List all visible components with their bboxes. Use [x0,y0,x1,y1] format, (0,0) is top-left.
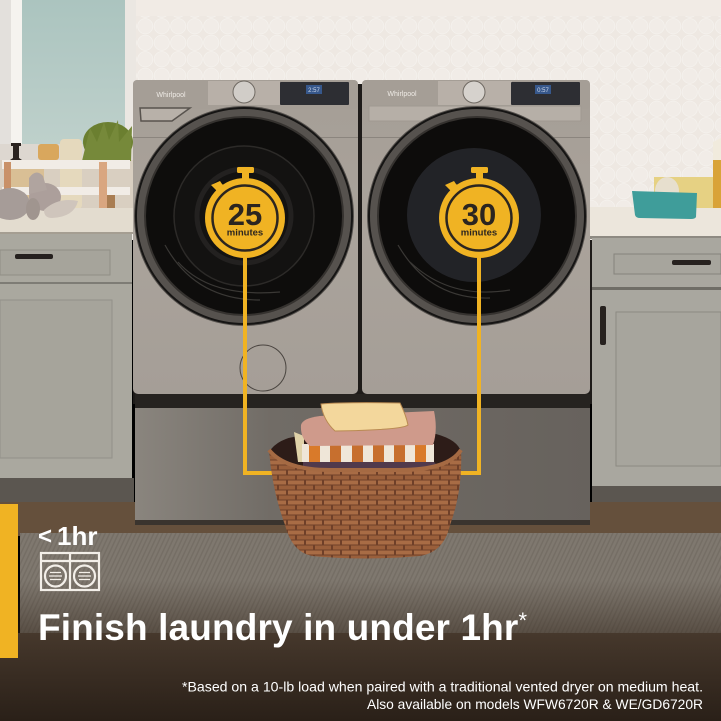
teal tray [632,191,697,219]
left counter shelf items [0,120,134,210]
door ring [134,106,354,326]
water inlet cap [240,345,286,391]
right counter and cabinet [588,207,721,506]
striped towel [294,432,434,462]
headline: * [518,608,527,633]
timer: washer 25 minutes: 25 [228,197,262,232]
dial [233,81,255,103]
yellow detergent bottle [713,160,721,208]
drum back [407,148,541,282]
timer: washer 25 minutes [205,167,285,258]
backsplash behind shelf [0,160,134,210]
brand: Whirlpool [387,91,417,98]
icon: washer and dryer pair [41,553,99,590]
window [0,0,136,168]
wicker basket body [269,450,461,558]
area rug [0,533,721,721]
display panel [280,82,349,105]
wall with hexagonal tile [0,0,721,240]
less than 1 hour badge [38,521,99,590]
drawer handle [15,254,53,259]
yellow towel [321,403,408,431]
drum [174,146,314,286]
display panel [511,82,580,105]
stuffed elephant toy [0,172,78,220]
connector line: washer [245,256,274,473]
timer: dryer 30 minutes: minutes [461,228,497,238]
floor [0,502,721,536]
door ring [367,106,587,326]
potted plant [82,120,133,162]
washer: 2:57 [308,88,320,94]
yellow box [654,177,713,208]
soap pump bottle [8,143,44,210]
sponge [38,144,59,160]
footnote: Also available on models WFW6720R & WE/GD6720R [367,696,703,712]
top control panel [362,80,590,109]
top recess [369,106,581,121]
headline: Finish laundry in under 1hr [38,607,518,648]
left counter and cabinet [0,208,134,502]
timer: washer 25 minutes: minutes [227,228,263,238]
drawer handle [672,260,711,265]
laundry basket with towels [269,403,461,558]
brand: Whirlpool [156,92,186,99]
dark gap between machines [356,84,364,244]
ceiling soffit [122,0,721,16]
washer [133,80,358,394]
dial [463,81,485,103]
right counter items [632,138,721,219]
top control panel [133,80,358,109]
connector line: dryer [458,256,479,473]
pedestal [135,394,590,520]
pink towel [301,411,436,446]
door handle [600,306,606,345]
toy [655,177,679,205]
dryer: 0:57 [537,88,549,94]
footnote [182,678,703,712]
dark gap behind machines [133,240,592,404]
timer: dryer 30 minutes: 30 [462,197,496,232]
dryer [362,80,590,394]
glass jar [60,139,82,209]
white basket shelf [2,160,130,209]
yellow accent bar [0,504,18,658]
footnote: *Based on a 10-lb load when paired with a traditional vented dryer on medium heat. [182,678,703,694]
basket interior [269,434,461,475]
detergent drawer [140,108,190,121]
label: less than 1hr: < [38,523,52,550]
purple towel [303,460,442,473]
label: less than 1hr: 1hr [57,521,97,551]
timer: dryer 30 minutes [439,167,519,258]
